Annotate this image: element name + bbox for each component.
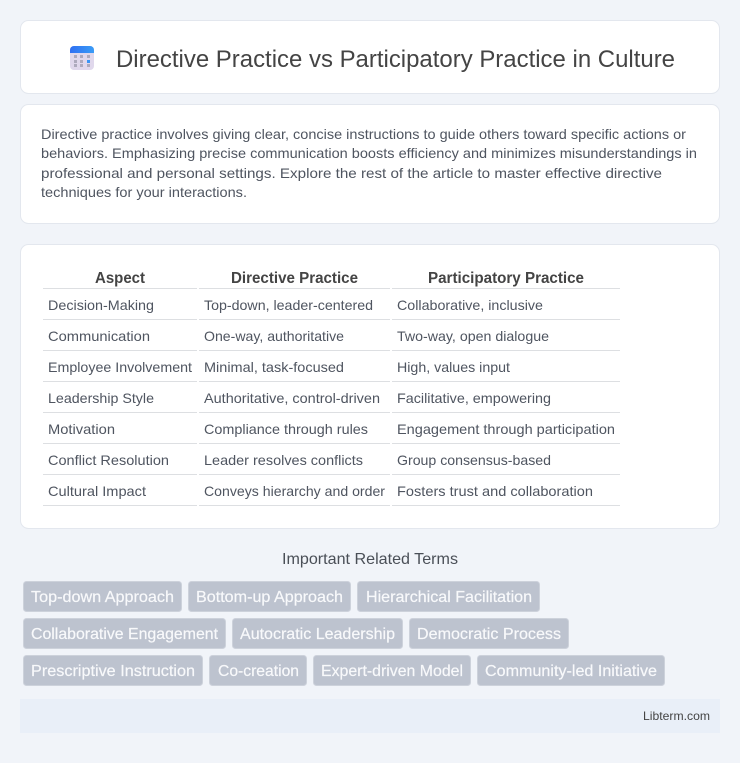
table header: Participatory Practice [428,270,584,287]
tag: Top-down Approach [31,589,174,606]
icon: calendar [70,46,94,70]
row: leadership style [43,390,620,412]
text block: introduction: professional and personal settings. Explore the rest of the article to master effective directive [41,165,662,181]
row: cultural impact: Cultural Impact [48,483,146,499]
table header: Directive Practice [231,270,358,287]
tag [410,618,568,648]
panel: title card [20,20,720,94]
heading: important related terms: Important Related Terms [282,551,458,568]
row: cultural impact: Conveys hierarchy and order [204,483,385,499]
tag [24,582,182,612]
table header [43,270,620,288]
row: cultural impact [43,483,620,506]
row: communication: Communication [48,328,150,344]
text block: introduction: techniques for your interactions. [41,184,247,200]
panel: introduction [20,104,720,224]
tag: Autocratic Leadership [240,626,395,643]
tag: Community-led Initiative [485,663,657,680]
row: motivation: Compliance through rules [204,421,368,437]
row: employee involvement: Employee Involvement [48,359,192,375]
row: conflict resolution: Conflict Resolution [48,452,169,468]
panel: related term tags [24,582,664,686]
row: conflict resolution: Group consensus-based [397,452,551,468]
footer: Libterm.com [643,709,710,723]
text block: introduction [41,126,697,200]
tag: Hierarchical Facilitation [366,589,532,606]
row: leadership style: Facilitative, empowering [397,390,551,406]
row: communication [43,328,620,350]
text block: introduction: behaviors. Emphasizing precise communication boosts efficiency and minimizes misunderstandings in [41,145,697,161]
tag: Bottom-up Approach [196,589,343,606]
tag [24,656,202,686]
tag: Prescriptive Instruction [31,663,195,680]
tag [478,656,664,686]
row: decision-making: Decision-Making [48,297,154,313]
tag [232,618,402,648]
tag: Democratic Process [417,626,561,643]
tag: Collaborative Engagement [31,626,219,643]
row: employee involvement: Minimal, task-focused [204,359,344,375]
row: motivation: Engagement through participation [397,421,615,437]
row: motivation [43,421,620,444]
text block: introduction: Directive practice involves giving clear, concise instructions to guide others toward specific actions or [41,126,686,142]
row: decision-making: Collaborative, inclusive [397,297,543,313]
table header: Aspect [95,270,146,287]
panel: comparison table [20,244,720,528]
row: communication: Two-way, open dialogue [397,328,549,344]
tag [188,582,350,612]
row: communication: One-way, authoritative [204,328,344,344]
row: cultural impact: Fosters trust and collaboration [397,483,593,499]
tag [24,618,226,648]
row: employee involvement [43,359,620,382]
row: decision-making: Top-down, leader-centered [204,297,373,313]
row: employee involvement: High, values input [397,359,510,375]
tag [358,582,540,612]
row: motivation: Motivation [48,421,115,437]
title: Directive Practice vs Participatory Practice in Culture [116,46,675,73]
tag: Expert-driven Model [321,663,463,680]
tag [210,656,306,686]
tag [314,656,470,686]
row: decision-making [43,297,620,320]
row: conflict resolution: Leader resolves conflicts [204,452,363,468]
footer [20,699,720,733]
tag: Co-creation [218,663,299,680]
row: leadership style: Leadership Style [48,390,154,406]
row: conflict resolution [43,452,620,474]
row: leadership style: Authoritative, control-driven [204,390,380,406]
